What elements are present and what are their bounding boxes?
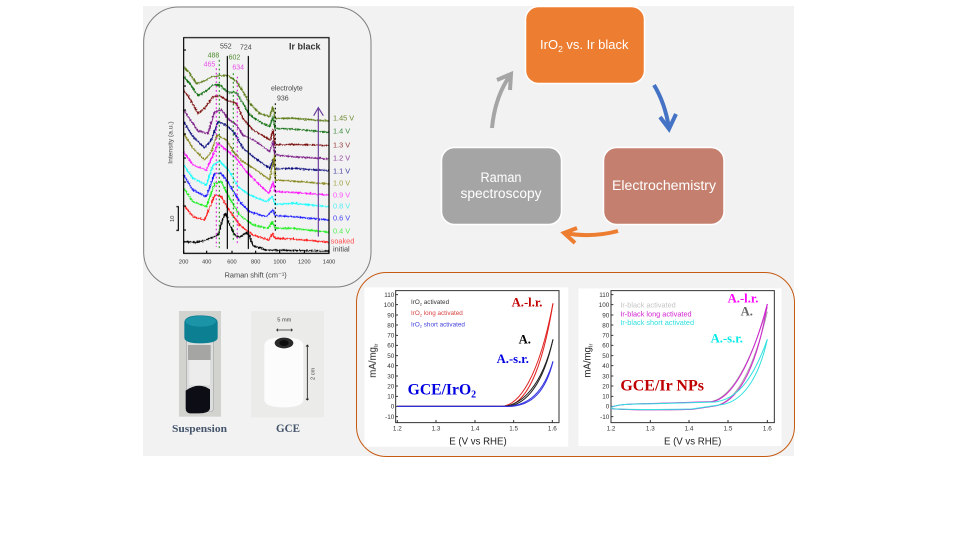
axis titles: E (V vs RHE) bbox=[664, 436, 721, 447]
legend: 2 bbox=[420, 324, 423, 329]
Raman x axis title: Raman shift (cm⁻¹) bbox=[225, 271, 287, 280]
y ticks: 40 bbox=[387, 363, 395, 370]
y ticks: 90 bbox=[387, 312, 395, 319]
x ticks: 1.2 bbox=[607, 426, 616, 433]
box: Raman spectroscopy: Raman bbox=[480, 170, 522, 185]
y ticks: -10 bbox=[600, 414, 610, 421]
curve labels: A.-l.r. bbox=[728, 292, 758, 306]
y ticks: 30 bbox=[387, 373, 395, 380]
box: IrO2 vs. Ir black bbox=[526, 6, 644, 84]
x ticks: 1.4 bbox=[685, 426, 694, 433]
Raman axis tick labels: 1000 bbox=[273, 260, 286, 266]
y ticks: 80 bbox=[387, 322, 395, 329]
legend: Ir-black activated bbox=[620, 300, 676, 309]
chart: GCE/Ir NPs: mA/mg bbox=[582, 347, 593, 378]
y ticks: 90 bbox=[602, 312, 610, 319]
x ticks bbox=[393, 426, 557, 433]
chart: GCE/Ir NPs: A.-s.r. bbox=[711, 332, 743, 346]
voltage labels: soaked bbox=[331, 237, 354, 246]
legend: Ir-black long activated bbox=[620, 309, 692, 318]
caption: Suspension: Suspension bbox=[172, 423, 227, 435]
arrow: orange, Electrochemistry to Raman bbox=[564, 228, 618, 243]
peak labels: 634 bbox=[232, 65, 244, 72]
x ticks: 1.5 bbox=[509, 426, 519, 433]
legend bbox=[620, 300, 694, 327]
voltage labels: 0.6 V bbox=[333, 214, 350, 223]
Raman reference lines bbox=[216, 56, 275, 249]
panel: electrochemistry charts bbox=[356, 272, 794, 456]
photo: suspension vial bbox=[179, 311, 221, 417]
box: Electrochemistry bbox=[604, 148, 724, 224]
peak labels: 465 bbox=[204, 62, 215, 69]
y ticks: 0 bbox=[391, 404, 395, 411]
chart: GCE/IrO2: A. bbox=[519, 333, 531, 347]
x ticks: 1.4 bbox=[471, 426, 480, 433]
Raman plot contents: 10 bbox=[170, 216, 176, 222]
y ticks: 110 bbox=[384, 292, 395, 299]
Raman axis tick labels: 400 bbox=[202, 260, 211, 266]
y ticks: 70 bbox=[602, 333, 610, 340]
peak labels: 724 bbox=[240, 45, 252, 52]
y ticks: 50 bbox=[387, 353, 395, 360]
voltage labels: 1.4 V bbox=[333, 127, 350, 136]
Raman axes bbox=[184, 38, 329, 253]
chart: GCE/IrO2: Ir bbox=[374, 344, 380, 347]
y ticks: 80 bbox=[602, 322, 610, 329]
voltage labels: 1.3 V bbox=[333, 140, 350, 149]
legend: long activated bbox=[422, 310, 463, 317]
curves bbox=[397, 303, 553, 406]
box: Electrochemistry: Electrochemistry bbox=[612, 178, 716, 193]
voltage labels: 0.9 V bbox=[333, 190, 350, 199]
x ticks bbox=[607, 426, 772, 433]
voltage labels: 1.1 V bbox=[333, 166, 350, 175]
legend: IrO bbox=[411, 299, 420, 306]
y ticks: 20 bbox=[602, 383, 610, 390]
chart: GCE/Ir NPs: Ir bbox=[588, 344, 594, 347]
x ticks: 1.5 bbox=[724, 426, 733, 433]
axis titles: E (V vs RHE) bbox=[449, 436, 507, 447]
axes bbox=[396, 291, 559, 423]
x ticks: 1.3 bbox=[646, 426, 655, 433]
y ticks: 10 bbox=[387, 394, 395, 401]
grey background panel bbox=[143, 6, 794, 456]
legend: IrO bbox=[411, 321, 420, 328]
voltage labels: initial bbox=[333, 245, 350, 254]
curves bbox=[611, 304, 767, 410]
x ticks: 1.3 bbox=[432, 426, 441, 433]
chart: GCE/Ir NPs: A. bbox=[741, 304, 753, 318]
peak labels: electrolyte bbox=[271, 86, 303, 93]
photo: GCE electrode bbox=[251, 311, 324, 417]
Raman axis tick labels: 1200 bbox=[298, 260, 311, 266]
voltage labels bbox=[331, 114, 354, 254]
y ticks: 100 bbox=[599, 302, 610, 309]
chart label: GCE/IrO bbox=[408, 382, 471, 399]
Raman traces bbox=[184, 67, 329, 251]
photo: GCE electrode: 2 cm bbox=[310, 367, 316, 380]
x ticks: 1.6 bbox=[763, 426, 772, 433]
box: Raman spectroscopy: spectroscopy bbox=[460, 186, 542, 201]
curve labels: A.-l.r. bbox=[512, 296, 542, 310]
trend arrow bbox=[314, 108, 323, 237]
chart: GCE/Ir NPs bbox=[578, 288, 782, 447]
peak labels: 552 bbox=[220, 43, 232, 50]
chart: GCE/IrO2 bbox=[364, 287, 568, 447]
y ticks: 30 bbox=[602, 373, 610, 380]
chart: GCE/IrO2: mA/mg bbox=[368, 347, 379, 378]
peak labels: 936 bbox=[277, 95, 289, 102]
Raman title: Ir black bbox=[289, 41, 320, 51]
Raman y axis title: Intensity (a.u.) bbox=[167, 121, 174, 164]
legend: 2 bbox=[420, 301, 423, 306]
voltage labels: 1.2 V bbox=[333, 153, 350, 162]
legend: Ir-black short activated bbox=[620, 318, 694, 327]
x ticks: 1.2 bbox=[393, 426, 402, 433]
caption: GCE: GCE bbox=[276, 423, 300, 435]
y ticks: 50 bbox=[602, 353, 610, 360]
legend: IrO bbox=[411, 310, 420, 317]
voltage labels: 1.45 V bbox=[333, 114, 354, 123]
box: Raman spectroscopy bbox=[442, 148, 562, 224]
voltage labels: 1.0 V bbox=[333, 178, 350, 187]
y ticks bbox=[599, 292, 610, 421]
peak labels bbox=[204, 43, 303, 102]
box: IrO2 vs. Ir black: IrO bbox=[540, 37, 558, 52]
y ticks: 10 bbox=[602, 394, 610, 401]
y ticks bbox=[384, 292, 395, 421]
x ticks: 1.6 bbox=[548, 426, 557, 433]
y ticks: 20 bbox=[387, 383, 395, 390]
voltage labels: 0.4 V bbox=[333, 227, 350, 236]
panel: Raman spectra bbox=[144, 7, 371, 287]
Raman axis tick labels bbox=[179, 260, 335, 266]
peak labels: 488 bbox=[208, 53, 219, 60]
legend bbox=[411, 299, 465, 329]
axes bbox=[611, 291, 774, 423]
arrow: grey, Raman to box 1 bbox=[492, 74, 511, 128]
y ticks: 70 bbox=[387, 333, 395, 340]
y ticks: -10 bbox=[385, 414, 395, 421]
y ticks: 110 bbox=[599, 292, 610, 299]
Raman axis tick labels: 800 bbox=[251, 260, 260, 266]
box: IrO2 vs. Ir black: 2 bbox=[558, 44, 563, 54]
y ticks: 60 bbox=[387, 343, 395, 350]
chart: GCE/IrO2: A.-s.r. bbox=[497, 352, 529, 366]
legend: short activated bbox=[422, 321, 465, 328]
legend: 2 bbox=[420, 312, 423, 317]
chart label: GCE/Ir NPs bbox=[620, 377, 704, 394]
y ticks: 100 bbox=[384, 302, 395, 309]
y ticks: 60 bbox=[602, 343, 610, 350]
Raman axis tick labels: 200 bbox=[179, 260, 188, 266]
scale bar bbox=[176, 207, 178, 230]
chart label: 2 bbox=[471, 389, 476, 400]
photo: GCE electrode: 5 mm bbox=[277, 318, 292, 324]
Raman plot contents bbox=[167, 38, 354, 280]
Raman axis tick labels: 1400 bbox=[323, 260, 335, 266]
voltage labels: 0.8 V bbox=[333, 202, 350, 211]
legend: activated bbox=[422, 299, 450, 306]
peak labels: 602 bbox=[229, 54, 240, 61]
Raman axis tick labels: 600 bbox=[227, 260, 237, 266]
arrow: blue, box 1 to Electrochemistry bbox=[654, 85, 676, 129]
box: IrO2 vs. Ir black: vs. Ir black bbox=[563, 37, 629, 52]
y ticks: 0 bbox=[606, 404, 610, 411]
y ticks: 40 bbox=[602, 363, 610, 370]
